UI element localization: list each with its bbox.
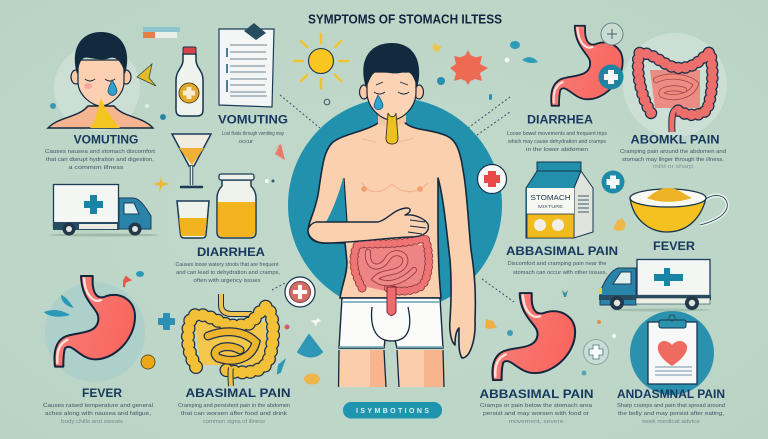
text block: vomuting right: Lost fluids through vomiting may <box>222 131 284 137</box>
text block: diarrhea left: and can lead to dehydration and cramps, <box>176 270 280 276</box>
text block: andasmnal pain: seek medical advice <box>642 419 700 425</box>
icon: plus teal lower <box>602 170 624 194</box>
text block: diarrhea right <box>507 131 607 153</box>
icon: small marks <box>278 324 290 373</box>
body <box>308 122 475 358</box>
heading: vomuting left: VOMUTING <box>74 132 138 146</box>
icon: red star <box>272 144 285 160</box>
icon: milk carton <box>526 162 593 238</box>
text block: vomuting left: a common illness <box>68 165 124 171</box>
icon: jar <box>217 174 256 238</box>
text block: abasimal pain lower right: Cramps or pain below the stomach area <box>480 403 593 409</box>
text block: abasimal pain lower right <box>480 403 593 425</box>
text block: diarrhea left: Causes loose watery stools that are frequent <box>176 262 279 268</box>
panel: central figure <box>294 34 475 387</box>
panel: central figure circle <box>288 98 502 312</box>
icon: bowl cup <box>630 188 727 232</box>
badge: ISYMBOTIONS <box>356 408 429 415</box>
icon: stomach left <box>44 271 155 382</box>
icon: martini glass <box>172 134 211 187</box>
intestines <box>354 238 429 292</box>
icon: sun <box>294 34 348 88</box>
panel: vomiting person <box>48 32 166 131</box>
text block: andasmnal pain: the belly and may persist after eating, <box>618 411 724 417</box>
text block: diarrhea left <box>176 262 280 284</box>
icon: small marks near stomach <box>510 41 538 63</box>
icon: plus teal upper <box>598 64 624 90</box>
text block: abasimal pain lower right: movement, severe <box>508 419 564 425</box>
dotted connectors <box>272 95 514 302</box>
title: SYMPTOMS OF STOMACH ILTESS <box>308 12 502 26</box>
icon: plus pale <box>584 340 608 364</box>
icon: yellow intestines <box>188 294 273 386</box>
text block: abasimal pain left: common signs of illness <box>203 419 265 425</box>
icon: small marks top <box>324 43 510 105</box>
text block: abasimal pain upper right: Discomfort and cramping pain near the <box>508 261 606 267</box>
icon: clipboard heart <box>630 311 714 395</box>
heading: vomuting right: VOMUTING <box>218 112 288 126</box>
icon: lower centre marks <box>298 318 322 384</box>
icon: badge left <box>285 277 315 307</box>
heading: abasimal pain upper right: ABBASIMAL PAIN <box>506 244 618 258</box>
icon: dots <box>265 179 274 183</box>
icon: yellow splash <box>613 218 626 231</box>
icon: small glass <box>177 201 209 238</box>
heading: abasimal pain left: ABASIMAL PAIN <box>186 386 290 400</box>
text block: diarrhea right: Loose bowel movements and frequent trips <box>507 131 607 137</box>
icon: striped tag <box>143 27 180 38</box>
hand and forearm <box>308 208 428 243</box>
heading: diarrhea left: DIARRHEA <box>197 245 265 259</box>
icon: plus outline top <box>601 23 623 45</box>
text block: abasimal pain lower right: persist and may worsen with food or <box>483 411 589 417</box>
text block: andasmnal pain: Sharp cramps and pain that spread around <box>617 403 725 409</box>
text block: vomuting right: occur <box>239 139 253 145</box>
icon: stomach lower right <box>492 293 575 380</box>
text block: abomkl pain: Cramping pain around the abdomen and <box>620 149 726 155</box>
text block: diarrhea left: often with urgency issues <box>194 278 261 284</box>
legs <box>338 350 386 387</box>
text block: abasimal pain left: that can worsen after food and drink <box>181 411 287 417</box>
icon: ambulance right <box>599 260 711 312</box>
text block: abasimal pain left <box>178 403 290 425</box>
text block: andasmnal pain <box>617 403 725 425</box>
text block: vomuting left: Causes nausea and stomach discomfort <box>45 149 155 155</box>
text block: abomkl pain <box>620 149 726 170</box>
icon: red intestines <box>623 33 727 137</box>
icon: ambulance left <box>49 184 159 236</box>
badge <box>343 402 442 418</box>
text block: fever left <box>43 403 153 425</box>
text block: fever left: aches along with nausea and fatigue, <box>45 411 151 417</box>
icon: scattered marks right <box>485 290 616 376</box>
text block: diarrhea right: in the lower abdomen <box>526 147 588 153</box>
icon: medicine bottle <box>176 47 203 116</box>
icon: plus <box>159 314 174 329</box>
icon: badge red cross <box>478 164 506 194</box>
heading: andasmnal pain: ANDASMNAL PAIN <box>617 387 725 401</box>
icon: milk carton: STOMACH <box>530 193 570 202</box>
text block: diarrhea right: which may cause dehydration and cramps <box>507 139 606 145</box>
heading: fever right: FEVER <box>653 239 695 253</box>
text block: abasimal pain upper right: stomach can occur with other issues, <box>513 270 607 276</box>
text block: fever left: body chills and sweats <box>61 419 123 425</box>
heading: fever left: FEVER <box>82 386 122 400</box>
icon: sparkle <box>153 176 170 194</box>
heading: abomkl pain: ABOMKL PAIN <box>630 132 720 146</box>
heading: diarrhea right: DIARRHEA <box>527 112 593 126</box>
head <box>360 85 368 99</box>
heading: abasimal pain lower right: ABBASIMAL PAIN <box>480 387 594 401</box>
text block: abasimal pain left: Cramping and persistent pain in the abdomen <box>178 403 290 409</box>
underwear <box>339 298 443 348</box>
text block: vomuting left: that can disrupt hydration and digestion, <box>46 157 154 163</box>
text block: vomuting left <box>45 149 155 171</box>
icon: milk carton: MIXTURE <box>538 204 563 209</box>
text block: abomkl pain: stomach may linger through the illness. <box>622 157 724 163</box>
text block: fever left: Causes raised temperature and general <box>43 403 153 409</box>
text block: abomkl pain: mild or sharp <box>653 164 693 170</box>
text block: abasimal pain upper right <box>508 261 607 276</box>
text block: vomuting right <box>222 131 284 145</box>
icon: stomach top right <box>551 26 623 106</box>
icon: document <box>219 23 274 107</box>
icon: star splat <box>450 50 488 85</box>
